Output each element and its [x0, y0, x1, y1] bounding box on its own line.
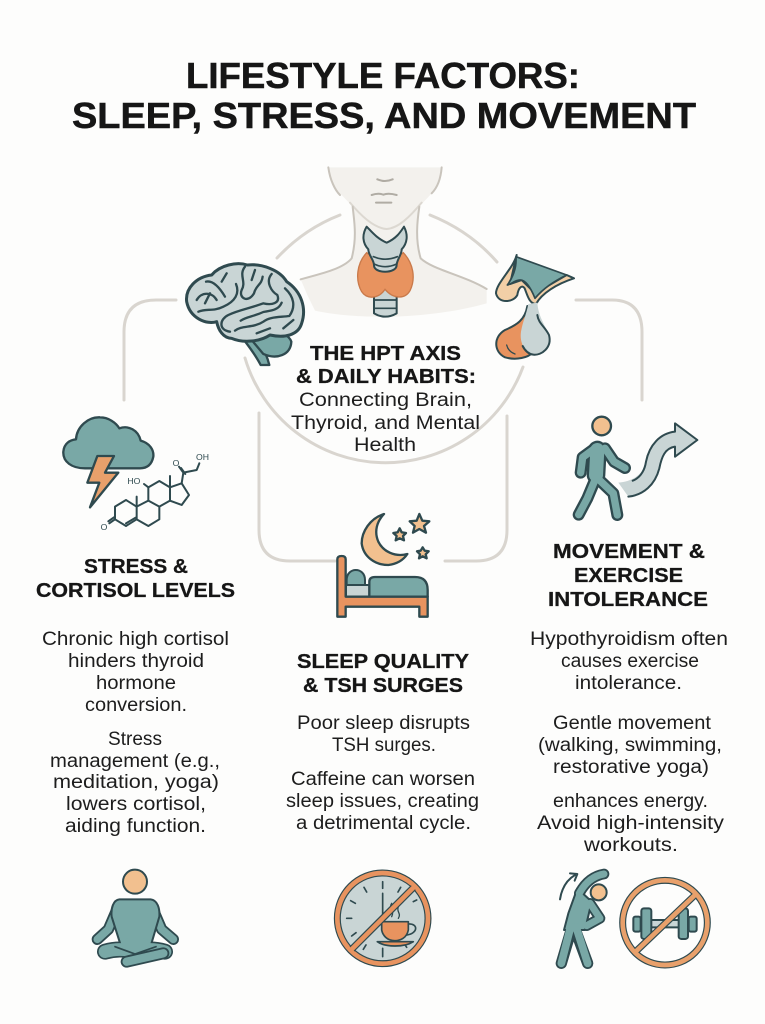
text: HPT axis [291, 343, 480, 456]
text: sleep body: Caffeine can worsen [291, 769, 475, 790]
text: sleep body [286, 713, 479, 834]
text: stress body: conversion. [85, 695, 187, 716]
text: movement body [530, 629, 728, 856]
text: stress body: aiding function. [65, 816, 206, 837]
heading: movement: MOVEMENT & [553, 541, 705, 563]
text: stress body: hormone [96, 673, 176, 694]
title: SLEEP, STRESS, AND MOVEMENT [72, 95, 696, 136]
text: movement body: workouts. [583, 835, 678, 856]
icon: meditating person [97, 870, 173, 962]
text: stress body: Stress [108, 729, 162, 750]
text: movement body: Avoid high-intensity [537, 813, 725, 834]
icon: storm cloud and cortisol molecule: HO [127, 476, 141, 486]
icon: storm cloud and cortisol molecule: O [101, 522, 108, 532]
text: movement body: causes exercise [561, 651, 699, 672]
text: sleep body: TSH surges. [332, 735, 436, 756]
heading: movement: INTOLERANCE [548, 589, 708, 611]
icon: brain [187, 264, 304, 365]
text: movement body: restorative yoga) [553, 757, 709, 778]
larynx [363, 227, 407, 272]
text: sleep body: sleep issues, creating [286, 791, 479, 812]
icon: stretching person [560, 873, 607, 963]
text: stress body: management (e.g., [50, 751, 220, 772]
text: HPT axis: Thyroid, and Mental [291, 413, 480, 434]
heading: sleep quality: & TSH SURGES [303, 675, 463, 697]
text: stress body: Chronic high cortisol [42, 629, 229, 650]
icon: pituitary gland [496, 255, 574, 359]
icon: storm cloud and cortisol molecule: O [173, 458, 180, 468]
text: sleep body: a detrimental cycle. [296, 813, 471, 834]
icon: bed, moon and stars [337, 514, 429, 617]
heading: sleep quality: SLEEP QUALITY [297, 651, 470, 673]
heading: stress and cortisol [36, 556, 235, 602]
text: HPT axis: Connecting Brain, [299, 390, 472, 411]
title: LIFESTYLE FACTORS: [186, 55, 580, 96]
heading: stress and cortisol: CORTISOL LEVELS [36, 580, 235, 602]
heading: movement [548, 541, 708, 611]
text: movement body: intolerance. [575, 673, 682, 694]
title [72, 55, 696, 136]
heading: movement: EXERCISE [574, 565, 683, 587]
connector lines [124, 215, 642, 561]
icon: storm cloud and cortisol molecule: OH [196, 452, 209, 462]
text: movement body: enhances energy. [553, 791, 708, 812]
text: movement body: Hypothyroidism often [530, 629, 728, 650]
text: stress body: meditation, yoga) [53, 772, 219, 793]
icon: walking person and arrow [579, 417, 697, 515]
thyroid gland [358, 253, 413, 297]
text: stress body [42, 629, 229, 837]
heading: stress and cortisol: STRESS & [84, 556, 188, 578]
text: HPT axis: Health [354, 435, 416, 456]
text: stress body: lowers cortisol, [66, 794, 206, 815]
text: movement body: Gentle movement [553, 713, 712, 734]
text: HPT axis: & DAILY HABITS: [296, 366, 476, 388]
trachea [374, 288, 397, 317]
icon: no late caffeine clock [337, 873, 428, 964]
heading: sleep quality [297, 651, 470, 697]
illustration: face, neck and thyroid [301, 167, 487, 317]
text: movement body: (walking, swimming, [538, 735, 722, 756]
text: HPT axis: THE HPT AXIS [310, 343, 461, 365]
text: stress body: hinders thyroid [68, 651, 204, 672]
text: sleep body: Poor sleep disrupts [297, 713, 470, 734]
icon: storm cloud and cortisol molecule [63, 417, 209, 532]
icon: no heavy weights [623, 880, 707, 965]
